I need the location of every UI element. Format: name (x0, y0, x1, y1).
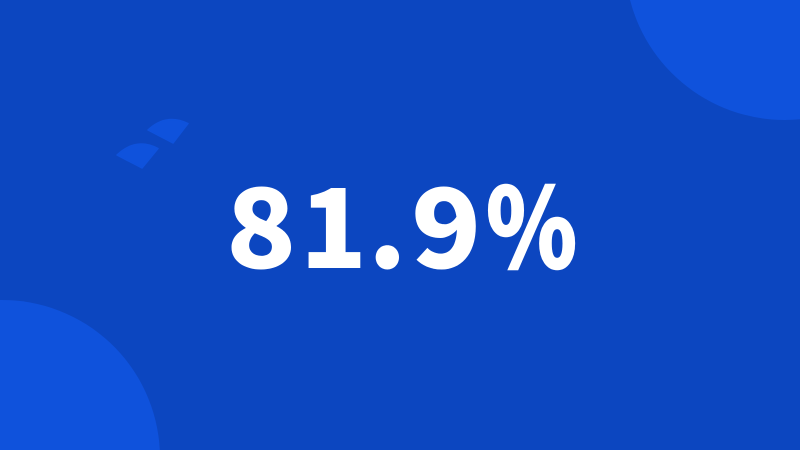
headline statistic: . (368, 140, 407, 300)
headline statistic: 1 (300, 140, 367, 300)
headline statistic: % (486, 140, 577, 300)
headline statistic: 9 (411, 140, 481, 300)
icon: signal fan logo (117, 119, 188, 168)
circle: bottom left (0, 300, 160, 450)
headline statistic: 8 (226, 140, 296, 300)
circle: top right (630, 0, 800, 120)
headline statistic (226, 140, 577, 300)
